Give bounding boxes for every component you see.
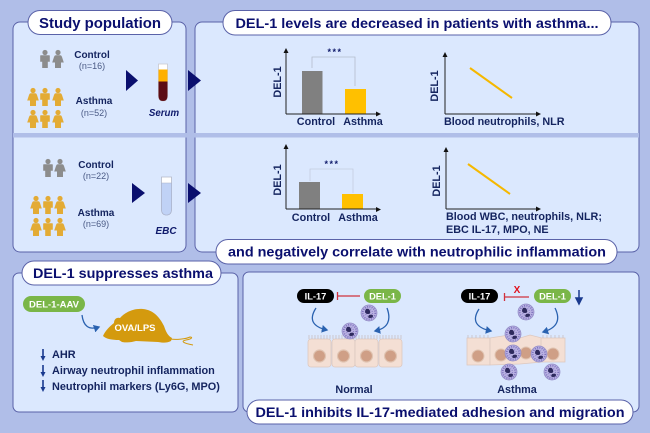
neutrophils <box>342 305 377 339</box>
outcome list <box>40 349 220 393</box>
band dividing serum and EBC rows <box>13 133 639 138</box>
serum control label <box>74 50 110 71</box>
icon: mouse: OVA/LPS <box>114 323 156 334</box>
curved arrows <box>475 308 558 332</box>
inhibition bar <box>338 292 360 300</box>
outcome list: AHR <box>52 349 76 361</box>
panel: study population <box>13 22 186 252</box>
bar chart: EBC DEL-1: DEL-1 <box>272 164 284 196</box>
icon: serum tube <box>158 64 168 101</box>
EBC control label <box>78 160 114 181</box>
heading: DEL-1 levels: DEL-1 levels are decreased in patients with asthma... <box>236 15 598 31</box>
DEL-1 badge: DEL-1 <box>539 292 566 302</box>
diagram: asthma epithelium <box>461 285 582 396</box>
bar chart: EBC DEL-1 <box>272 144 381 224</box>
icon: mouse <box>103 309 193 345</box>
EBC control label: Control <box>78 160 114 171</box>
serum asthma label: Asthma <box>76 96 113 107</box>
epithelial cells <box>308 335 402 367</box>
heading: DEL-1 levels <box>223 10 611 35</box>
icon: EBC tube <box>162 177 172 215</box>
heading: adhesion and migration <box>247 400 633 424</box>
bar chart: serum DEL-1: DEL-1 <box>272 66 284 98</box>
IL-17 badge: IL-17 <box>469 292 490 302</box>
damaged epithelium <box>467 335 565 365</box>
neutrophils <box>501 304 560 380</box>
arrow: serum to results <box>188 70 201 91</box>
panel: IL-17 mechanism <box>243 272 639 412</box>
bar chart: EBC DEL-1: Control <box>292 212 330 224</box>
bar chart: EBC DEL-1: *** <box>324 159 340 169</box>
panel: DEL-1 suppresses asthma <box>13 273 238 412</box>
EBC asthma label: (n=69) <box>83 219 109 229</box>
outcome list: Neutrophil markers (Ly6G, MPO) <box>52 381 220 393</box>
IL-17 badge: IL-17 <box>305 292 326 302</box>
arrow: EBC to results <box>188 183 201 203</box>
EBC asthma label: Asthma <box>78 208 115 219</box>
heading: DEL-1 suppresses asthma: DEL-1 suppresses asthma <box>33 265 213 281</box>
heading: study population: Study population <box>39 15 161 32</box>
line chart: EBC correlation: DEL-1 <box>431 165 443 197</box>
line chart: EBC correlation: Blood WBC, neutrophils, NLR; <box>446 211 602 223</box>
EBC asthma group icons <box>30 196 66 236</box>
EBC asthma label <box>78 208 115 229</box>
outcome list: Airway neutrophil inflammation <box>52 365 215 377</box>
arrow: to EBC <box>132 183 145 203</box>
serum asthma label: (n=52) <box>81 108 107 118</box>
bar chart: EBC DEL-1: Asthma <box>338 212 379 224</box>
heading: study population <box>28 10 172 34</box>
heading: negative correlation: and negatively correlate with neutrophilic inflammation <box>228 244 606 260</box>
EBC label: EBC <box>155 226 177 237</box>
DEL-1 badge: DEL-1 <box>369 292 396 302</box>
bar chart: serum DEL-1: *** <box>327 47 343 57</box>
icon: down arrows <box>40 349 46 392</box>
line chart: serum correlation: DEL-1 <box>429 70 441 102</box>
EBC control label: (n=22) <box>83 171 109 181</box>
serum control label: (n=16) <box>79 61 105 71</box>
serum label: Serum <box>149 108 179 119</box>
bar chart: serum DEL-1 <box>272 47 384 128</box>
serum control label: Control <box>74 50 110 61</box>
panel: DEL-1 levels <box>195 22 639 252</box>
line chart: serum correlation: Blood neutrophils, NLR <box>444 116 565 128</box>
label: Asthma <box>497 384 538 396</box>
line chart: EBC correlation <box>431 147 602 236</box>
EBC control group icons <box>43 159 66 177</box>
label: Normal <box>335 384 373 396</box>
curved arrows <box>312 308 389 331</box>
line chart: EBC correlation: EBC IL-17, MPO, NE <box>446 224 549 236</box>
diagram: normal epithelium <box>297 289 402 396</box>
bar chart: serum DEL-1: Control <box>297 116 335 128</box>
serum asthma group icons <box>27 88 64 128</box>
arrow: AAV to mouse <box>82 315 99 328</box>
serum control group icons <box>40 50 64 68</box>
serum asthma label <box>76 96 113 118</box>
heading: negative correlation <box>216 240 617 264</box>
line chart: serum correlation <box>429 52 565 128</box>
failed inhibition: X <box>514 285 521 296</box>
bar chart: serum DEL-1: Asthma <box>343 116 384 128</box>
arrow: to serum <box>126 70 138 91</box>
heading: adhesion and migration: DEL-1 inhibits IL-17-mediated adhesion and migration <box>256 404 624 420</box>
DEL-1-AAV badge: DEL-1-AAV <box>29 300 80 310</box>
heading: DEL-1 suppresses asthma <box>22 261 221 285</box>
DEL-1-AAV badge <box>23 296 85 312</box>
down arrow <box>576 290 582 304</box>
